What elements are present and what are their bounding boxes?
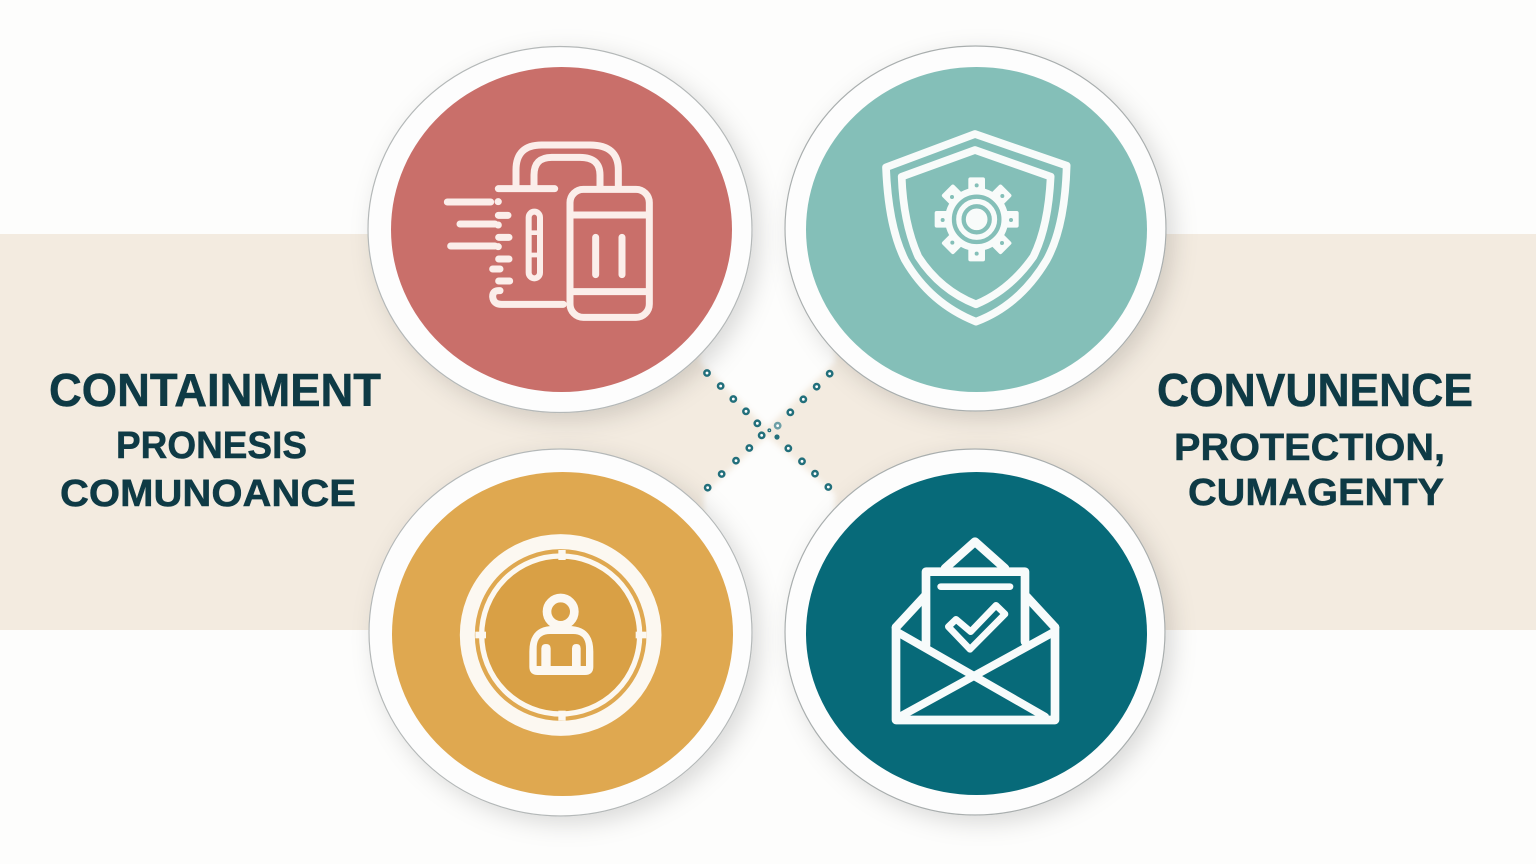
- panel: teal shield circle: [785, 46, 1166, 411]
- text block: left labels: COMUNOANCE: [60, 473, 356, 515]
- white centre wedges: [700, 225, 835, 640]
- icon: shield with gear: [886, 134, 1067, 322]
- text block: right labels: PROTECTION,: [1174, 427, 1445, 469]
- background band: [0, 234, 1536, 630]
- text block: left labels: PRONESIS: [116, 425, 307, 467]
- panel: red lock circle: [368, 46, 752, 412]
- icon: padlock and phone: [447, 145, 649, 317]
- panel: gold person circle: [369, 449, 752, 816]
- text block: right labels: [1157, 364, 1473, 514]
- text block: left labels: CONTAINMENT: [49, 364, 381, 416]
- icon: person in ring: [467, 542, 654, 728]
- text block: right labels: CONVUNENCE: [1157, 364, 1473, 416]
- text block: left labels: [49, 364, 381, 515]
- text block: right labels: CUMAGENTY: [1188, 472, 1444, 514]
- panel: dark teal envelope circle: [785, 449, 1165, 815]
- icon: envelope with checked letter: [896, 542, 1055, 720]
- connector: dotted cross: [704, 370, 832, 490]
